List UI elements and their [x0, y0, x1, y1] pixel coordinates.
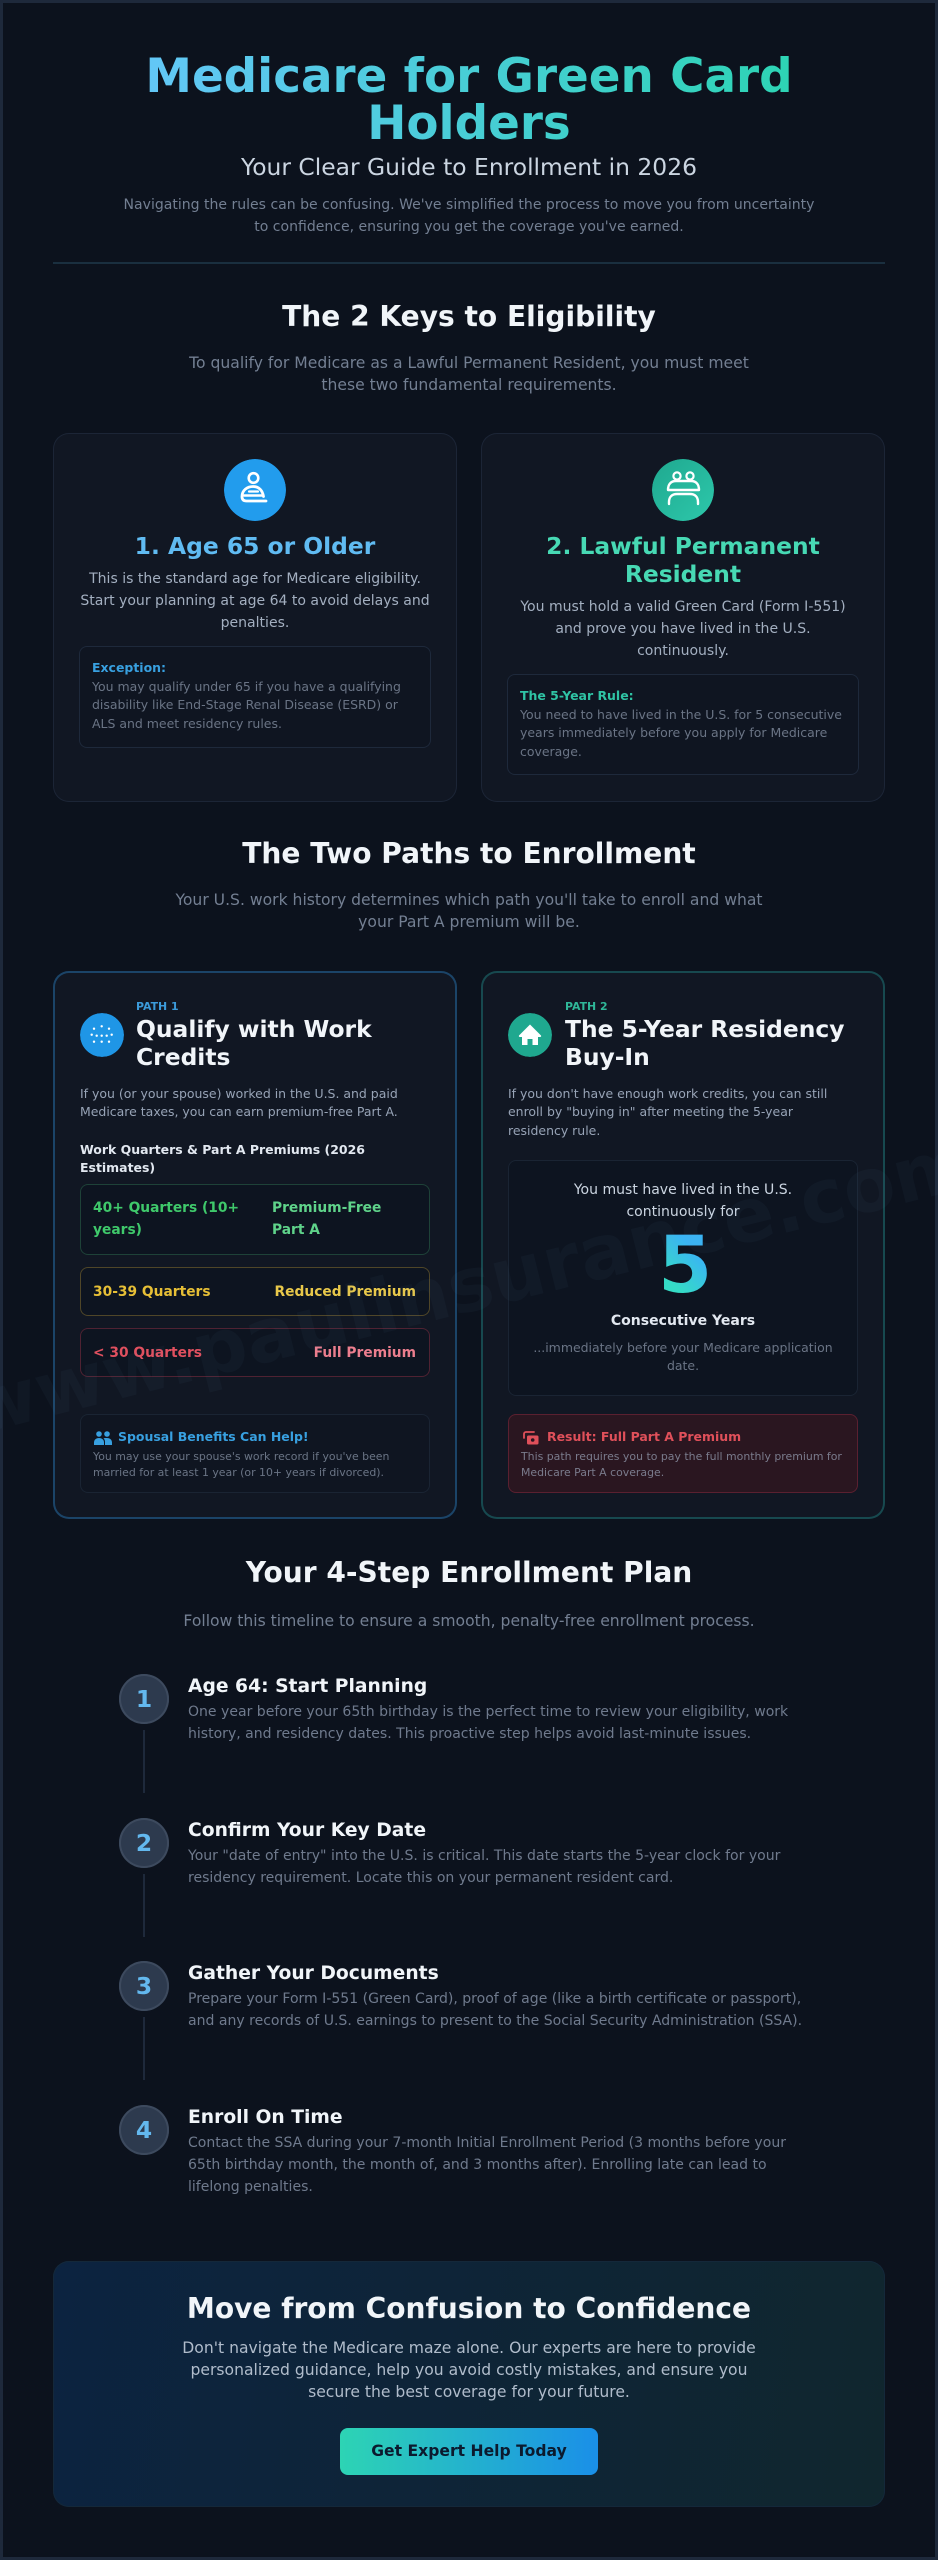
step 1 — [119, 1674, 788, 1793]
step text — [188, 1848, 780, 1886]
eligibility intro: To qualify for Medicare as a Lawful Permanent Resident, you must meet — [189, 354, 749, 372]
icon: house — [508, 1013, 552, 1057]
step title: Confirm Your Key Date — [188, 1820, 426, 1841]
path description — [508, 1086, 827, 1138]
path title — [136, 1015, 372, 1071]
five year rule box — [507, 674, 859, 775]
intro text: Navigating the rules can be confusing. We've simplified the process to move you from uncertainty — [124, 197, 814, 213]
intro text: to confidence, ensuring you get the coverage you've earned. — [254, 219, 684, 235]
paths intro: your Part A premium will be. — [358, 913, 580, 931]
cta text: secure the best coverage for your future. — [308, 2383, 630, 2401]
timeline — [119, 1674, 802, 2195]
callout text — [93, 1450, 389, 1478]
path description — [80, 1086, 398, 1119]
quarters: years) — [93, 1222, 142, 1238]
premium: Full Premium — [314, 1344, 416, 1360]
quarters: < 30 Quarters — [93, 1344, 202, 1360]
icon: person — [224, 459, 286, 521]
step number — [119, 2105, 169, 2155]
step text: history, and residency dates. This proactive step helps avoid last-minute issues. — [188, 1726, 751, 1742]
icon: work credits — [80, 1013, 124, 1057]
exception text: You may qualify under 65 if you have a qualifying — [92, 678, 401, 694]
subtitle: Your Clear Guide to Enrollment in 2026 — [241, 153, 697, 181]
step number — [119, 1818, 169, 1868]
card title — [546, 532, 820, 588]
exception box — [79, 646, 431, 748]
card description — [80, 571, 430, 631]
heading: plan: Your 4-Step Enrollment Plan — [246, 1556, 692, 1589]
card title: 2. Lawful Permanent — [546, 532, 820, 560]
row: under 30 quarters — [80, 1328, 430, 1377]
premium: Part A — [272, 1222, 320, 1238]
card description: Start your planning at age 64 to avoid delays and — [80, 593, 430, 609]
cta button — [340, 2428, 598, 2475]
stat unit: Consecutive Years — [611, 1313, 755, 1329]
step title: Enroll On Time — [188, 2107, 343, 2128]
path description: Medicare taxes, you can earn premium-free Part A. — [80, 1104, 398, 1119]
step text: residency requirement. Locate this on your permanent resident card. — [188, 1870, 673, 1886]
title: Holders — [367, 97, 571, 151]
cta text — [182, 2339, 756, 2401]
stat lead-in: You must have lived in the U.S. — [574, 1182, 792, 1198]
step number: 1 — [136, 1685, 152, 1713]
rule label: The 5-Year Rule: — [520, 688, 634, 702]
table heading — [80, 1142, 365, 1175]
callout title: Spousal Benefits Can Help! — [118, 1429, 309, 1444]
path description: residency rule. — [508, 1123, 600, 1138]
path label: PATH 2 — [565, 1000, 608, 1013]
rule text — [520, 706, 842, 759]
path label: PATH 1 — [136, 1000, 179, 1013]
path title: Qualify with Work — [136, 1015, 372, 1043]
step number: 2 — [136, 1829, 152, 1857]
step 4 — [119, 2105, 786, 2195]
card description: and prove you have lived in the U.S. — [555, 621, 811, 637]
step text — [188, 1704, 788, 1742]
icon: money — [523, 1431, 538, 1444]
path description: If you don't have enough work credits, you can still — [508, 1086, 827, 1100]
callout text: Medicare Part A coverage. — [521, 1466, 664, 1478]
five year stat box — [508, 1160, 858, 1396]
step text: 65th birthday month, the month of, and 3 months after). Enrolling late can lead to — [188, 2157, 767, 2173]
path description: If you (or your spouse) worked in the U.S. and paid — [80, 1086, 398, 1100]
rule text: You need to have lived in the U.S. for 5 consecutive — [520, 706, 842, 722]
card title: 1. Age 65 or Older — [135, 532, 375, 560]
plan intro: Follow this timeline to ensure a smooth, penalty-free enrollment process. — [183, 1612, 755, 1630]
card description — [520, 599, 846, 659]
cta button: Get Expert Help Today — [371, 2442, 567, 2460]
path title: The 5-Year Residency — [565, 1015, 844, 1043]
header — [124, 50, 814, 235]
step number — [119, 1674, 169, 1724]
paths intro: Your U.S. work history determines which path you'll take to enroll and what — [175, 891, 763, 909]
step text: and any records of U.S. earnings to present to the Social Security Administration (SSA). — [188, 2013, 802, 2029]
callout: spousal benefits — [80, 1414, 430, 1493]
icon: people — [94, 1431, 112, 1445]
path description: enroll by "buying in" after meeting the 5-year — [508, 1104, 793, 1119]
connector — [143, 1730, 145, 1793]
cta text: Don't navigate the Medicare maze alone. Our experts are here to provide — [182, 2339, 756, 2357]
stat lead-in: continuously for — [626, 1204, 740, 1220]
step number: 4 — [136, 2116, 152, 2144]
step text — [188, 2135, 786, 2195]
callout title: Result: Full Part A Premium — [547, 1429, 741, 1444]
step 2 — [119, 1818, 780, 1937]
stat note: date. — [667, 1358, 699, 1373]
panel: call to action — [53, 2261, 885, 2507]
step 3 — [119, 1961, 802, 2080]
step text: One year before your 65th birthday is the perfect time to review your eligibility, work — [188, 1704, 788, 1720]
stat number: 5 — [658, 1221, 712, 1311]
stat note — [533, 1340, 833, 1373]
eligibility intro: these two fundamental requirements. — [321, 376, 617, 394]
callout text: married for at least 1 year (or 10+ years if divorced). — [93, 1466, 384, 1478]
panel: lawful permanent resident — [481, 433, 885, 802]
quarters — [93, 1200, 239, 1238]
paths intro — [175, 891, 763, 931]
stat lead-in — [574, 1182, 792, 1220]
cta title: Move from Confusion to Confidence — [187, 2292, 751, 2325]
card description: This is the standard age for Medicare eligibility. — [89, 571, 421, 587]
table heading: Estimates) — [80, 1160, 155, 1175]
step number — [119, 1961, 169, 2011]
callout: result — [508, 1414, 858, 1493]
step title: Gather Your Documents — [188, 1963, 439, 1984]
exception label: Exception: — [92, 660, 166, 674]
exception text: disability like End-Stage Renal Disease (ESRD) or — [92, 697, 398, 712]
panel: path 2 — [481, 971, 885, 1519]
intro text — [124, 197, 814, 235]
exception text — [92, 678, 401, 731]
callout text: This path requires you to pay the full monthly premium for — [521, 1450, 842, 1463]
title — [100, 54, 838, 148]
path title: Credits — [136, 1043, 230, 1071]
exception text: ALS and meet residency rules. — [92, 716, 282, 731]
step text: Prepare your Form I-551 (Green Card), proof of age (like a birth certificate or passport), — [188, 1991, 801, 2007]
step title: Age 64: Start Planning — [188, 1676, 427, 1697]
heading: paths: The Two Paths to Enrollment — [242, 837, 696, 870]
premium: Premium-Free — [272, 1200, 381, 1216]
connector — [143, 1874, 145, 1937]
row: 30-39 quarters — [80, 1267, 430, 1316]
card title: Resident — [625, 560, 741, 588]
card description: penalties. — [221, 615, 289, 631]
icon: residents — [652, 459, 714, 521]
path title — [565, 1015, 844, 1071]
premium: Reduced Premium — [275, 1284, 416, 1300]
premium — [272, 1200, 381, 1238]
card description: continuously. — [637, 643, 729, 659]
step text: Contact the SSA during your 7-month Initial Enrollment Period (3 months before your — [188, 2135, 786, 2151]
row: 40+ quarters — [80, 1184, 430, 1255]
panel: age 65 — [53, 433, 457, 802]
eligibility intro — [189, 354, 749, 394]
callout text: You may use your spouse's work record if you've been — [93, 1450, 389, 1463]
quarters: 30-39 Quarters — [93, 1284, 211, 1300]
step number: 3 — [136, 1972, 152, 2000]
rule text: years immediately before you apply for Medicare — [520, 725, 827, 740]
quarters: 40+ Quarters (10+ — [93, 1200, 239, 1216]
header divider — [53, 262, 885, 264]
callout text — [521, 1450, 842, 1478]
rule text: coverage. — [520, 744, 582, 759]
heading: eligibility: The 2 Keys to Eligibility — [282, 300, 656, 333]
path title: Buy-In — [565, 1043, 650, 1071]
step text: Your "date of entry" into the U.S. is critical. This date starts the 5-year clock for your — [188, 1848, 780, 1864]
step text — [188, 1991, 802, 2029]
connector — [143, 2017, 145, 2080]
title: Medicare for Green Card — [145, 50, 793, 104]
step text: lifelong penalties. — [188, 2179, 313, 2195]
stat note: ...immediately before your Medicare application — [533, 1340, 833, 1355]
card description: You must hold a valid Green Card (Form I-551) — [520, 599, 846, 615]
table heading: Work Quarters & Part A Premiums (2026 — [80, 1142, 365, 1156]
panel: path 1 — [53, 971, 457, 1519]
cta text: personalized guidance, help you avoid costly mistakes, and ensure you — [191, 2361, 747, 2379]
